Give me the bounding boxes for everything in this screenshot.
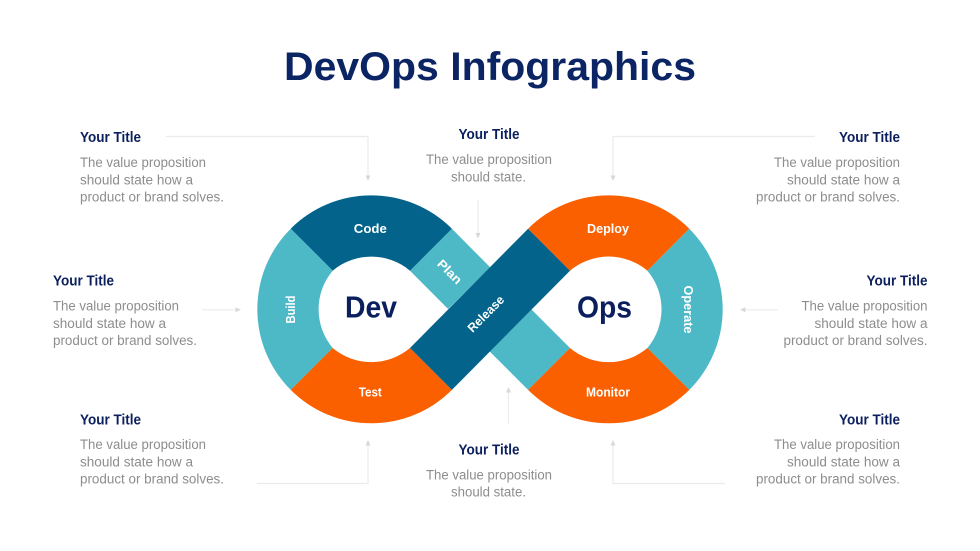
text block: bottom left: The value proposition	[80, 437, 206, 452]
text block: top right: product or brand solves.	[756, 190, 900, 205]
text block: middle left: The value proposition	[53, 298, 179, 314]
text block: middle right	[784, 272, 928, 348]
text block: bottom left: should state how a	[80, 454, 193, 469]
text block: top center: should state.	[451, 169, 526, 184]
segment: operate: Operate	[681, 285, 695, 334]
label: Ops: Ops	[577, 290, 632, 324]
text block: top right: The value proposition	[774, 155, 900, 170]
segment: test: Test	[359, 386, 383, 400]
text block: bottom right: product or brand solves.	[756, 472, 900, 487]
segment: release	[410, 229, 570, 390]
segment: build: Build	[284, 296, 298, 324]
text block: middle left: should state how a	[53, 316, 166, 331]
segment: test	[291, 348, 452, 423]
text block: bottom right: The value proposition	[774, 437, 900, 452]
text block: top center: Your Title	[458, 126, 520, 143]
text block: bottom left	[80, 411, 224, 487]
segment: build	[257, 229, 333, 390]
text block: bottom center: should state.	[451, 485, 526, 500]
text block: middle right: The value proposition	[802, 298, 928, 314]
text block: top left: Your Title	[80, 129, 141, 146]
text block: top center: The value proposition	[426, 152, 552, 167]
text block: middle left	[53, 272, 197, 348]
text block: bottom left: product or brand solves.	[80, 472, 224, 487]
text block: bottom right: should state how a	[787, 454, 900, 469]
segment: monitor: Monitor	[586, 386, 630, 400]
segment: plan	[410, 229, 490, 309]
segment: code	[291, 195, 452, 271]
arrow: top center to plan	[476, 200, 480, 238]
text block: middle right: should state how a	[814, 316, 928, 331]
arrow: top left to code	[166, 136, 370, 181]
text block: top right: Your Title	[839, 129, 900, 146]
text block: top left: product or brand solves.	[80, 190, 224, 205]
arrow: middle right to operate	[740, 307, 778, 312]
text block: top left: should state how a	[80, 172, 193, 187]
arrow: bottom left to test	[257, 440, 370, 484]
segment: deploy: Deploy	[587, 222, 629, 236]
text block: bottom center: Your Title	[458, 441, 520, 458]
text block: middle right: product or brand solves.	[784, 333, 928, 348]
label: Dev: Dev	[345, 290, 398, 324]
text block: top right: should state how a	[787, 172, 900, 187]
text block: bottom right	[756, 411, 900, 487]
segment: monitor	[528, 348, 689, 423]
text block: middle left: product or brand solves.	[53, 333, 197, 348]
segment: unlabelled teal link	[490, 310, 570, 390]
text block: middle left: Your Title	[53, 272, 114, 290]
arrow: top right to deploy	[610, 136, 815, 181]
text block: bottom left: Your Title	[80, 411, 141, 428]
segment: operate	[647, 229, 723, 390]
arrow: bottom right to monitor	[610, 440, 725, 484]
text block: top right	[756, 129, 900, 205]
text block: bottom center: The value proposition	[426, 467, 552, 482]
text block: top left	[80, 129, 224, 205]
text block: top center	[426, 126, 552, 184]
text block: middle right: Your Title	[866, 272, 928, 290]
text block: top left: The value proposition	[80, 155, 206, 170]
infinity loop diagram	[257, 195, 723, 423]
text block: bottom center	[426, 441, 552, 500]
segment: deploy	[528, 195, 689, 271]
arrow: bottom center to teal link	[506, 387, 511, 424]
segment: plan: Plan	[434, 257, 465, 287]
arrow: middle left to build	[202, 307, 241, 312]
text block: bottom right: Your Title	[839, 411, 900, 428]
title: DevOps Infographics	[284, 45, 696, 89]
segment: code: Code	[354, 222, 387, 236]
segment: release: Release	[465, 293, 507, 335]
